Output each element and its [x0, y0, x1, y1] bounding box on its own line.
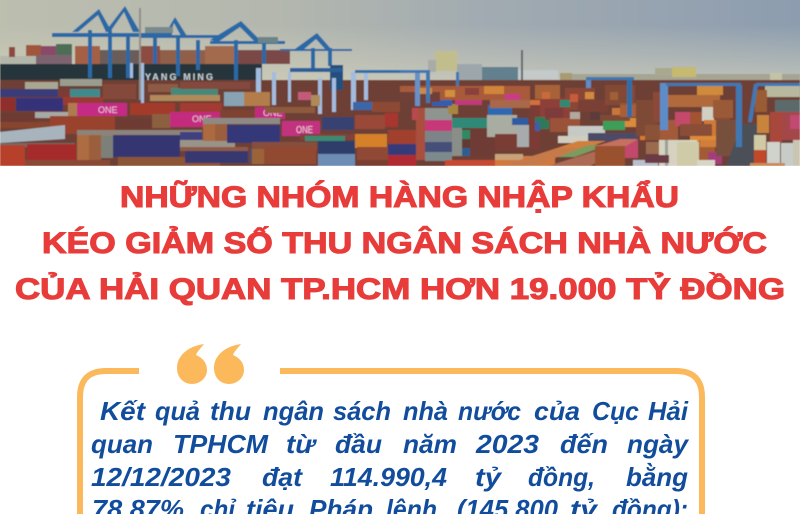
- quote text: [91, 396, 690, 514]
- quote text: quan: [91, 429, 153, 459]
- quote text: TPHCM: [173, 429, 269, 459]
- quote text: năm: [403, 429, 457, 459]
- containers: centre: [265, 92, 555, 166]
- quay cranes: [52, 6, 352, 90]
- pink container: ONE: [296, 125, 313, 136]
- quote text: 2023: [475, 429, 540, 459]
- quote text: Hải: [648, 396, 689, 426]
- title: [15, 180, 785, 306]
- quote frame: [80, 371, 702, 514]
- containers: front rows left: [25, 118, 317, 166]
- photo: container port: [0, 0, 800, 166]
- sky: [0, 0, 800, 98]
- quote text: từ: [286, 429, 318, 459]
- quote text: sách: [333, 396, 391, 426]
- far shore buildings: [428, 50, 800, 100]
- containers: foreground tops: [500, 139, 658, 166]
- container logos: ONE: [263, 108, 283, 118]
- container logos: ONE: [98, 105, 118, 115]
- quote text: tỷ: [475, 462, 503, 492]
- containers: right centre stacks: [400, 85, 660, 150]
- title: NHỮNG NHÓM HÀNG NHẬP KHẨU: [120, 180, 679, 214]
- container logos: [98, 105, 283, 124]
- ground of containers: [0, 80, 800, 166]
- quote text: Kết: [100, 396, 146, 426]
- quote text: ngân: [263, 396, 324, 426]
- title: CỦA HẢI QUAN TP.HCM HƠN 19.000 TỶ ĐỒNG: [15, 272, 785, 306]
- quote text: nhà: [403, 396, 448, 426]
- quote text: ngày: [627, 429, 690, 459]
- quote text: Cục: [592, 396, 640, 426]
- quote text: đến: [560, 429, 608, 459]
- quote text: đồng,: [528, 462, 595, 492]
- pink container: [282, 121, 320, 136]
- quote text: thu: [210, 396, 251, 426]
- quote text: bằng: [626, 462, 688, 492]
- containers: middle rows left: [0, 103, 285, 166]
- title: KÉO GIẢM SỐ THU NGÂN SÁCH NHÀ NƯỚC: [42, 226, 767, 260]
- icon: quotation marks: [177, 344, 244, 384]
- ship name: YANG MING: [145, 72, 213, 82]
- ship with containers: [0, 44, 290, 85]
- quote text: 114.990,4: [330, 462, 448, 492]
- quote text: đạt: [262, 462, 303, 492]
- yard gantries left: [130, 8, 400, 114]
- yard gantries right: [400, 70, 800, 147]
- quote text: 12/12/2023: [91, 462, 232, 492]
- containers: far right: [645, 85, 800, 166]
- quote text: nước: [458, 396, 522, 426]
- containers: far rows: [0, 79, 270, 111]
- container logos: ONE: [192, 114, 212, 124]
- quote text: quả: [155, 396, 200, 426]
- quote text: của: [534, 396, 580, 426]
- quote text: đầu: [335, 429, 382, 459]
